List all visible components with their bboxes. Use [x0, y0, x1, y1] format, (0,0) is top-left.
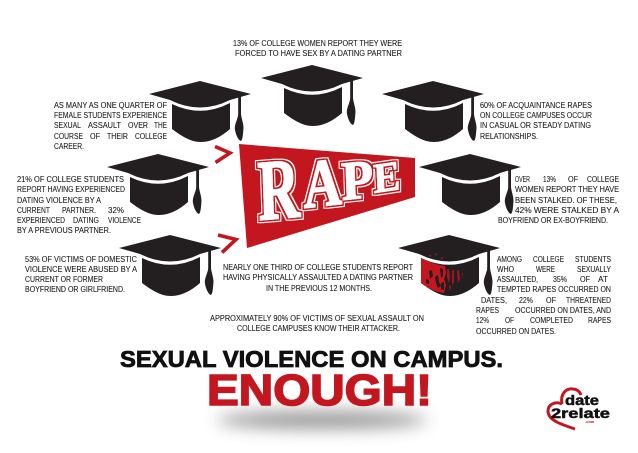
text: rapes on dates statistic: SEXUALLY	[577, 265, 612, 274]
text: domestic violence statistic: 53% OF VICTIMS OF DOMESTIC	[25, 255, 137, 264]
logo domain: .com	[585, 419, 595, 424]
text: dating violence statistic: PARTNER.	[62, 206, 96, 215]
text: one quarter statistic: COURSE	[54, 132, 83, 141]
pennant word: P	[340, 148, 374, 212]
pennant	[239, 140, 415, 248]
icon: graduation cap lower left	[119, 235, 221, 296]
text: dating violence statistic: 32%	[108, 206, 124, 215]
text: domestic violence statistic	[25, 255, 138, 294]
text: physical assault statistic: IN THE PREVIOUS 12 MONTHS.	[266, 284, 372, 293]
icon: graduation cap middle right	[419, 154, 521, 215]
text: rapes on dates statistic	[476, 255, 612, 336]
logo wordmark second line: 2relate	[551, 405, 610, 421]
text: acquaintance rapes statistic: ON COLLEGE CAMPUSES OCCUR	[480, 111, 592, 120]
icon: graduation cap top center	[261, 65, 363, 126]
text: dating violence statistic	[17, 175, 141, 235]
text: domestic violence statistic: BOYFRIEND OR GIRLFRIEND.	[25, 285, 125, 294]
text: one quarter statistic: COLLEGE	[135, 132, 167, 141]
text: rapes on dates statistic: OCCURRED ON DATES, AND	[515, 306, 611, 315]
text: dating violence statistic: DATING	[73, 216, 99, 225]
text: domestic violence statistic: VIOLENCE WERE ABUSED BY A	[25, 265, 138, 274]
text: acquaintance rapes statistic	[480, 101, 592, 141]
text: physical assault statistic: NEARLY ONE THIRD OF COLLEGE STUDENTS REPORT	[223, 263, 413, 272]
text: stalking statistic: WOMEN REPORT THEY HAVE	[515, 185, 619, 194]
text: physical assault statistic: HAVING PHYSICALLY ASSAULTED A DATING PARTNER	[223, 273, 413, 282]
text: one quarter statistic: OVER	[128, 121, 148, 130]
text: stalking statistic: OVER	[515, 175, 530, 184]
text: rapes on dates statistic: COMPLETED	[530, 316, 573, 325]
pennant word: A	[302, 145, 343, 224]
text: rapes on dates statistic: TEMPTED RAPES OCCURRED ON	[497, 285, 611, 294]
text: acquaintance rapes statistic: IN CASUAL OR STEADY DATING	[480, 121, 591, 130]
text: one quarter statistic: AS MANY AS ONE QUARTER OF	[54, 101, 167, 110]
text: one quarter statistic: THEIR	[107, 132, 128, 141]
text: forced sex statistic	[233, 39, 402, 58]
text: stalking statistic	[498, 175, 620, 225]
text: dating violence statistic: 21% OF COLLEGE STUDENTS	[17, 175, 124, 184]
logo heart outline	[548, 389, 581, 429]
pennant word: R	[256, 140, 302, 239]
text: rapes on dates statistic: AMONG	[497, 255, 522, 264]
logo wordmark: date	[565, 392, 599, 408]
text: one quarter statistic: CAREER.	[54, 142, 84, 151]
text: dating violence statistic: DATING VIOLENCE BY A	[17, 196, 102, 205]
text: dating violence statistic: REPORT HAVING EXPERIENCED	[17, 185, 125, 194]
text: dating violence statistic: CURRENT	[17, 206, 50, 215]
text: stalking statistic: COLLEGE	[587, 175, 619, 184]
text: one quarter statistic: THE	[154, 121, 167, 130]
text: stalking statistic: BOYFRIEND OR EX-BOYFRIEND.	[498, 216, 608, 225]
text: forced sex statistic: 13% OF COLLEGE WOMEN REPORT THEY WERE	[233, 39, 402, 48]
text: know attacker statistic	[210, 314, 424, 333]
text: one quarter statistic: FEMALE STUDENTS EXPERIENCE	[54, 111, 167, 120]
text: domestic violence statistic: CURRENT OR FORMER	[25, 275, 103, 284]
text: know attacker statistic: APPROXIMATELY 90% OF VICTIMS OF SEXUAL ASSAULT ON	[210, 314, 424, 323]
chevron arrow lower	[218, 235, 236, 252]
text: rapes on dates statistic: DATES,	[481, 296, 507, 305]
text: one quarter statistic: ASSAULT	[88, 121, 121, 130]
ground shadow	[217, 411, 427, 429]
text: rapes on dates statistic: OCCURRED ON DATES.	[476, 327, 556, 336]
text: rapes on dates statistic: STUDENTS	[575, 255, 611, 264]
text: dating violence statistic: VIOLENCE	[108, 216, 141, 225]
text: rapes on dates statistic: OF	[505, 316, 514, 325]
pennant word: E	[372, 151, 401, 202]
text: rapes on dates statistic: RAPES	[588, 316, 611, 325]
text: stalking statistic: OF	[568, 175, 578, 184]
icon: graduation cap upper right	[382, 81, 484, 142]
icon: graduation cap middle left	[107, 154, 209, 215]
text: dating violence statistic: BY A PREVIOUS PARTNER.	[17, 226, 111, 235]
text: stalking statistic: 13%	[543, 175, 556, 184]
heading: sexual violence on campus: SEXUAL VIOLENCE ON CAMPUS.	[120, 346, 503, 372]
text: one quarter statistic: SEXUAL	[54, 121, 82, 130]
text: rapes on dates statistic: 22%	[519, 296, 533, 305]
text: know attacker statistic: COLLEGE CAMPUSES KNOW THEIR ATTACKER.	[237, 324, 400, 333]
pennant word	[256, 140, 401, 239]
logo: date2relate	[548, 389, 610, 429]
text: one quarter statistic	[54, 101, 167, 151]
text: forced sex statistic: FORCED TO HAVE SEX BY A DATING PARTNER	[235, 49, 402, 58]
text: physical assault statistic	[223, 263, 413, 293]
text: rapes on dates statistic: 35%	[553, 275, 567, 284]
text: stalking statistic: BEEN STALKED. OF THESE,	[515, 196, 617, 205]
text: rapes on dates statistic: THREATENED	[566, 296, 611, 305]
text: rapes on dates statistic: OF	[580, 275, 590, 284]
text: rapes on dates statistic: WHO	[497, 265, 514, 274]
text: rapes on dates statistic: OF	[546, 296, 556, 305]
chevron arrow upper	[215, 146, 230, 162]
text: acquaintance rapes statistic: RELATIONSHIPS.	[480, 132, 538, 141]
text: rapes on dates statistic: RAPES	[476, 306, 499, 315]
icon: graduation cap upper left	[149, 81, 251, 142]
text: rapes on dates statistic: COLLEGE	[533, 255, 564, 264]
text: dating violence statistic: EXPERIENCED	[17, 216, 65, 225]
text: rapes on dates statistic: WERE	[536, 265, 555, 274]
icon: blood-stained graduation cap lower right	[398, 235, 500, 296]
text: acquaintance rapes statistic: 60% OF ACQUAINTANCE RAPES	[480, 101, 592, 110]
text: rapes on dates statistic: ASSAULTED,	[497, 275, 538, 284]
text: stalking statistic: 42% WERE STALKED BY A	[515, 206, 620, 215]
heading: enough: ENOUGH!	[207, 366, 432, 415]
text: one quarter statistic: OF	[90, 132, 100, 141]
text: rapes on dates statistic: AT	[598, 275, 608, 284]
text: rapes on dates statistic: 12%	[476, 316, 489, 325]
